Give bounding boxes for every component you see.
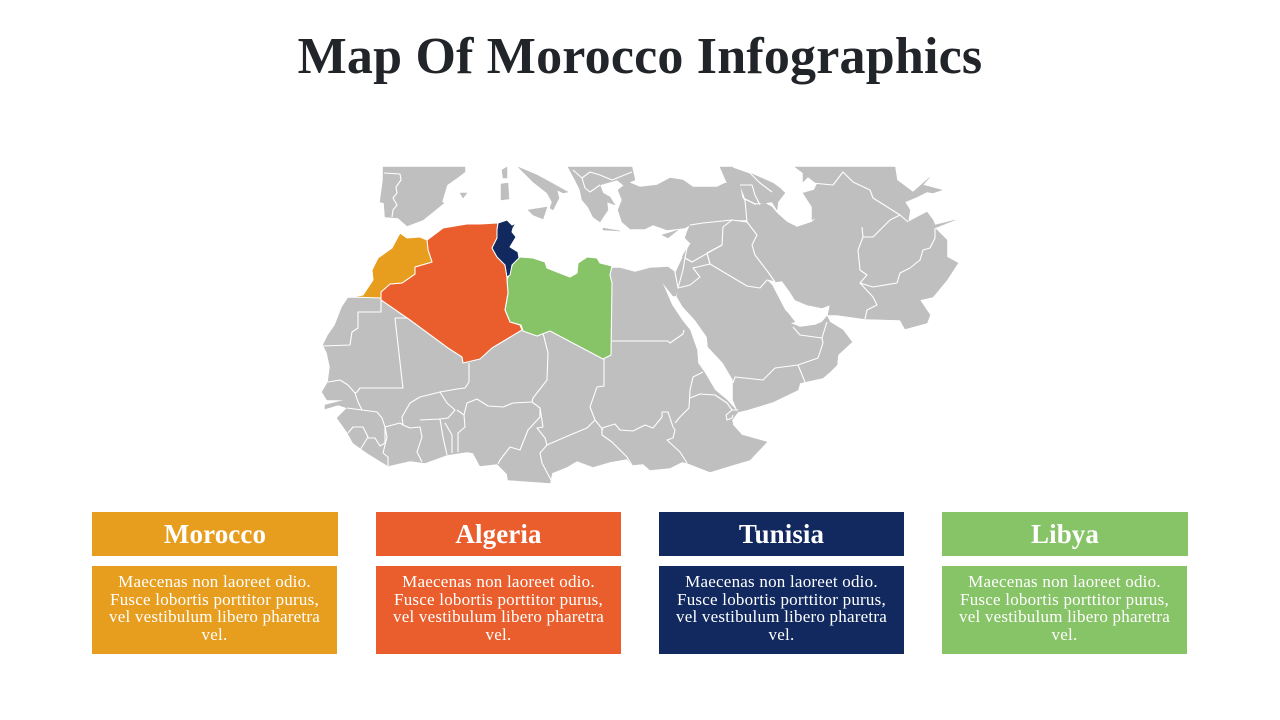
header: Libya: Libya bbox=[1031, 519, 1099, 549]
text panel: Algeria: vel vestibulum libero pharetra bbox=[393, 607, 604, 626]
text panel: Algeria: Maecenas non laoreet odio. bbox=[402, 572, 595, 591]
text panel: Libya: vel. bbox=[1052, 625, 1077, 644]
text panel: Tunisia: vel. bbox=[769, 625, 794, 644]
text panel: Libya: vel vestibulum libero pharetra bbox=[959, 607, 1170, 626]
header: Morocco bbox=[92, 512, 338, 556]
text panel: Tunisia bbox=[659, 566, 904, 654]
text panel: Tunisia: Maecenas non laoreet odio. bbox=[685, 572, 878, 591]
header: Tunisia bbox=[659, 512, 904, 556]
header: Tunisia: Tunisia bbox=[739, 519, 824, 549]
text panel: Morocco: vel vestibulum libero pharetra bbox=[109, 607, 320, 626]
header: Algeria bbox=[376, 512, 621, 556]
text panel: Libya: Fusce lobortis porttitor purus, bbox=[960, 590, 1169, 609]
grey surrounding land bbox=[322, 167, 958, 483]
text panel: Algeria: Fusce lobortis porttitor purus, bbox=[394, 590, 603, 609]
text panel: Morocco: Fusce lobortis porttitor purus, bbox=[110, 590, 319, 609]
Tunisia bbox=[492, 220, 519, 277]
Morocco bbox=[352, 233, 432, 298]
title: Map Of Morocco Infographics bbox=[298, 28, 982, 85]
text panel: Algeria bbox=[376, 566, 621, 654]
text panel: Tunisia: Fusce lobortis porttitor purus, bbox=[677, 590, 886, 609]
header: Morocco: Morocco bbox=[164, 519, 266, 549]
header: Algeria: Algeria bbox=[455, 519, 542, 549]
text panel: Libya: Maecenas non laoreet odio. bbox=[968, 572, 1161, 591]
text panel: Libya bbox=[942, 566, 1187, 654]
white country borders bbox=[323, 167, 935, 480]
text panel: Morocco: Maecenas non laoreet odio. bbox=[118, 572, 311, 591]
text panel: Morocco bbox=[92, 566, 337, 654]
Algeria bbox=[381, 223, 522, 363]
text panel: Morocco: vel. bbox=[202, 625, 227, 644]
Libya bbox=[505, 257, 612, 359]
text panel: Algeria: vel. bbox=[486, 625, 511, 644]
text panel: Tunisia: vel vestibulum libero pharetra bbox=[676, 607, 887, 626]
header: Libya bbox=[942, 512, 1188, 556]
